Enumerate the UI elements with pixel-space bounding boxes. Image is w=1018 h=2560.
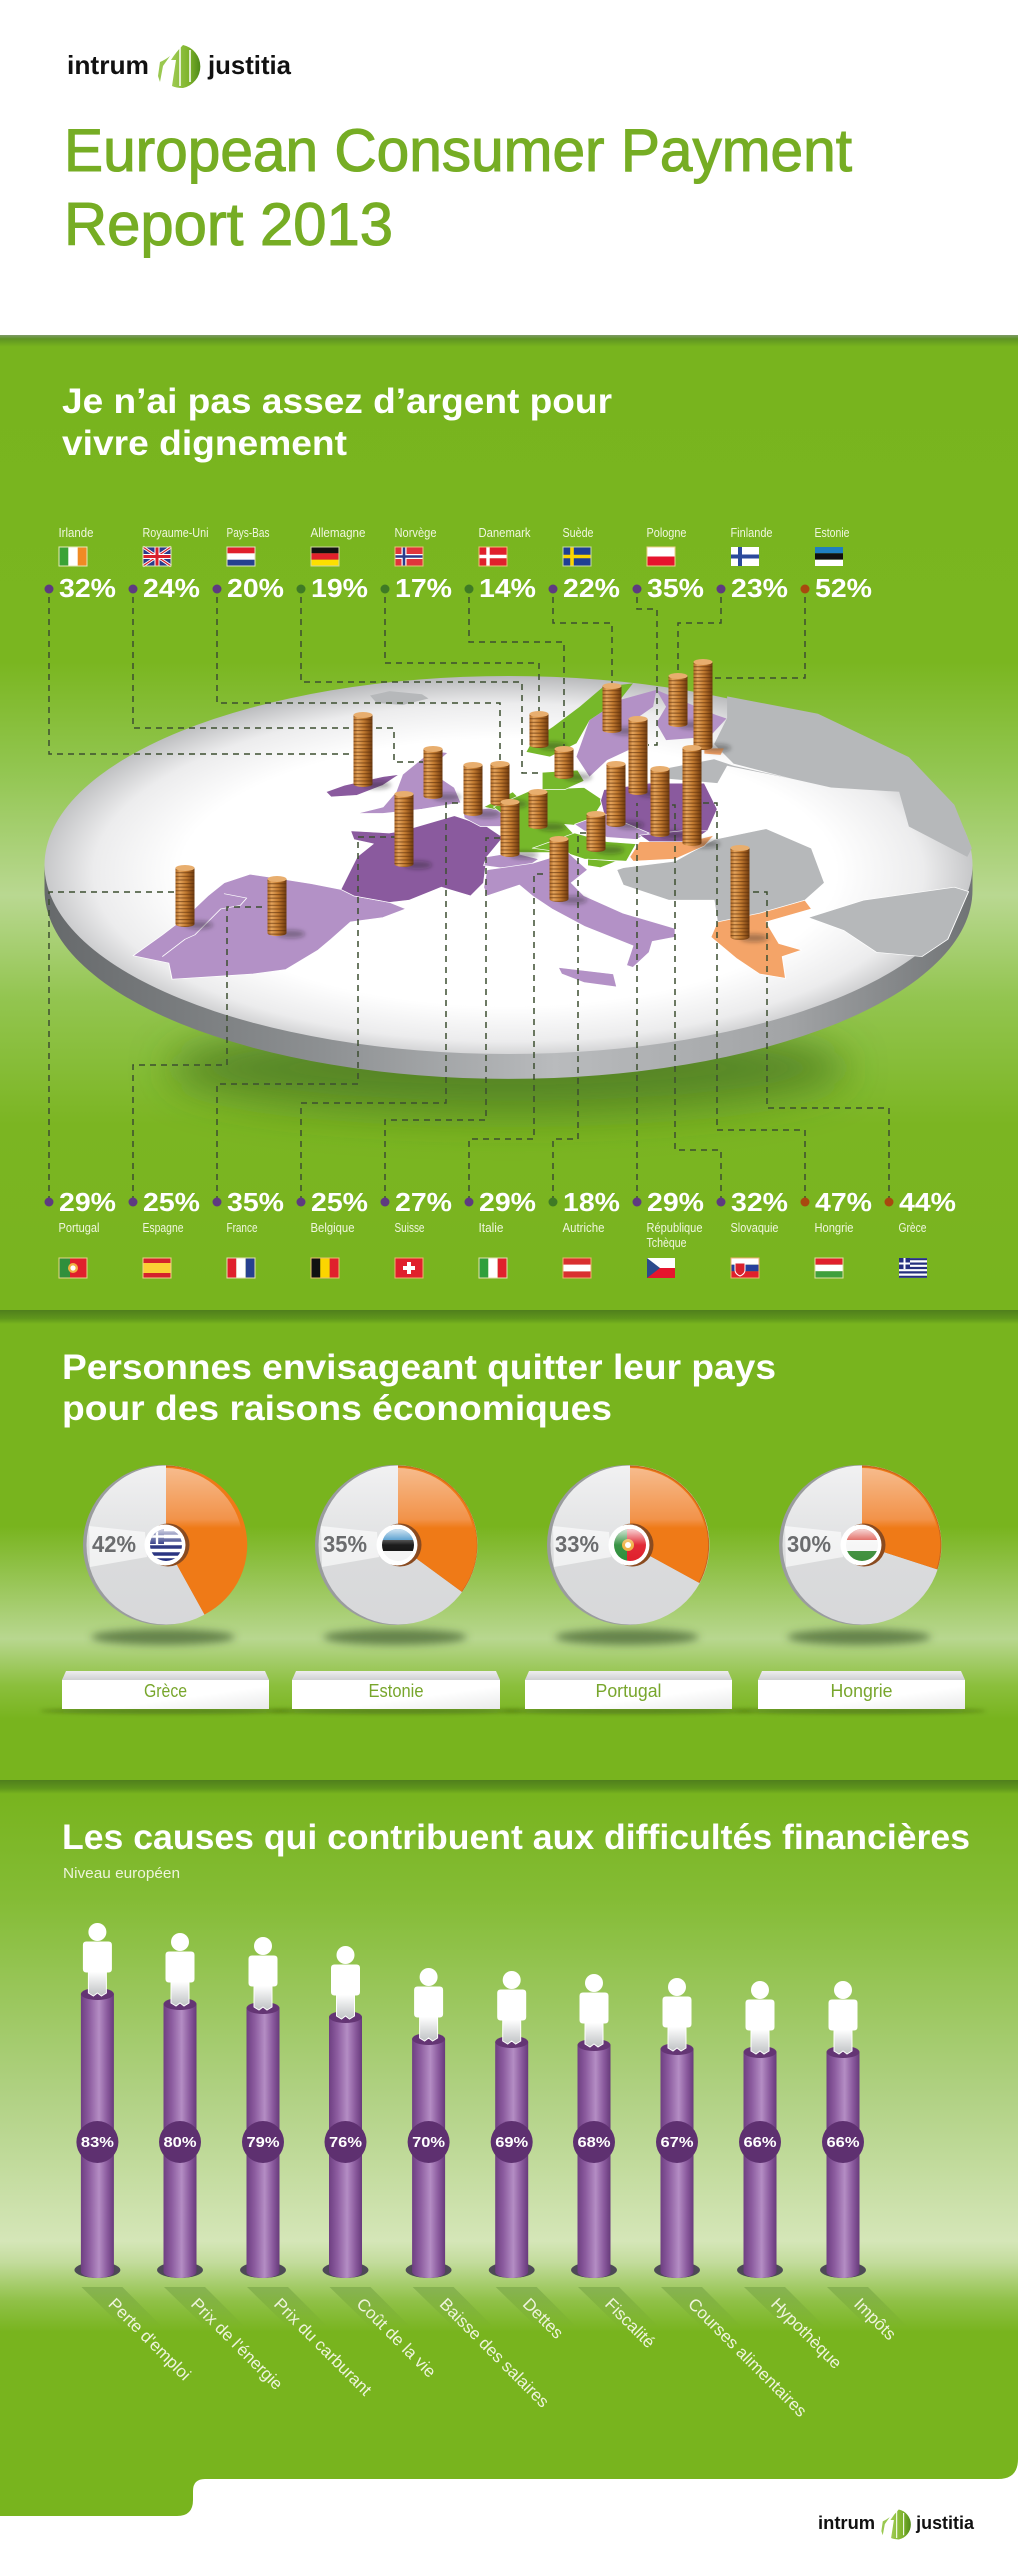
icon: Estonian flag bbox=[382, 1529, 414, 1561]
bar: Impôts 66% bbox=[820, 1981, 908, 2344]
dashed leader lines bbox=[49, 597, 889, 1202]
country: République Tchèque 29%: Tchèque bbox=[646, 1235, 686, 1250]
bar: Courses alimentaires 67%: Courses alimentaires bbox=[684, 2294, 811, 2421]
label box: Hongrie: Hongrie bbox=[830, 1681, 892, 1701]
bar: Baisse des salaires 70%: Baisse des salaires bbox=[436, 2294, 553, 2411]
panel: emigration section bbox=[0, 1310, 1018, 1780]
bar: Perte d'emploi 83%: 83% bbox=[81, 2134, 114, 2151]
country: Belgique 25%: 25% bbox=[311, 1187, 368, 1217]
country: Finlande 23%: 23% bbox=[731, 573, 788, 603]
stack: Suède bbox=[602, 683, 640, 735]
country: Portugal 29%: 29% bbox=[59, 1187, 116, 1217]
country: Norvège 17%: Norvège bbox=[394, 525, 436, 540]
country: Royaume-Uni 24%: Royaume-Uni bbox=[142, 525, 209, 540]
bar: Fiscalité 68%: 68% bbox=[578, 2134, 610, 2151]
bar: Perte d'emploi 83% bbox=[74, 1923, 194, 2384]
country: Estonie 52%: Estonie bbox=[814, 525, 850, 540]
country: Finlande 23% bbox=[716, 525, 788, 603]
stack: Estonie bbox=[694, 659, 731, 752]
country: Pays-Bas 20%: 20% bbox=[227, 573, 284, 603]
country: Italie 29% bbox=[464, 1187, 536, 1278]
label box: Hongrie bbox=[736, 1671, 986, 1714]
country: Pays-Bas 20%: Pays-Bas bbox=[226, 525, 270, 540]
stack: Hongrie bbox=[682, 745, 720, 848]
label box: Portugal bbox=[503, 1671, 753, 1714]
stack: Norvège bbox=[530, 711, 567, 750]
footer logo: justitia bbox=[915, 2513, 975, 2533]
pie chart: Portugal 33%: 33% bbox=[555, 1531, 599, 1557]
country: République Tchèque 29%: 29% bbox=[647, 1187, 704, 1217]
title: Report 2013 bbox=[64, 191, 393, 258]
country: France 35%: 35% bbox=[227, 1187, 284, 1217]
panel: causes section bbox=[0, 1780, 1018, 2516]
country: Estonie 52%: 52% bbox=[815, 573, 872, 603]
stack: Irlande bbox=[354, 712, 391, 789]
country: Irlande 32% bbox=[44, 525, 116, 603]
top country row bbox=[44, 525, 872, 603]
stack: Slovaquie bbox=[650, 766, 688, 839]
country: Allemagne 19%: Allemagne bbox=[310, 525, 366, 540]
country: Autriche 18%: Autriche bbox=[562, 1220, 604, 1235]
heading: not enough money: vivre dignement bbox=[62, 424, 347, 463]
bar: Courses alimentaires 67%: 67% bbox=[660, 2134, 694, 2151]
stack: Portugal bbox=[176, 865, 213, 929]
bar: Prix de l'énergie 80%: Prix de l'énergie bbox=[187, 2294, 286, 2394]
logo: intrum justitia: intrum bbox=[67, 50, 149, 80]
country: Slovaquie 32% bbox=[716, 1187, 788, 1278]
stack: Espagne bbox=[268, 876, 305, 938]
country: Danemark 14%: 14% bbox=[479, 573, 536, 603]
country: Suède 22%: 22% bbox=[563, 573, 620, 603]
map disc bbox=[44, 676, 972, 1079]
logo: intrum justitia: justitia bbox=[207, 50, 292, 80]
label box: Estonie bbox=[271, 1671, 521, 1714]
country: Danemark 14% bbox=[464, 525, 536, 603]
heading: not enough money: Je n’ai pas assez d’argent pour bbox=[62, 382, 612, 421]
heading: leaving the country bbox=[62, 1348, 776, 1428]
country: Pologne 35% bbox=[632, 525, 704, 603]
country: Pologne 35%: Pologne bbox=[646, 525, 686, 540]
pie chart: Hongrie 30% bbox=[779, 1465, 942, 1645]
country: Belgique 25%: Belgique bbox=[310, 1220, 354, 1235]
country: République Tchèque 29%: République bbox=[646, 1220, 702, 1235]
heading: leaving the country: pour des raisons économiques bbox=[62, 1389, 612, 1428]
country: République Tchèque 29% bbox=[632, 1187, 704, 1278]
country: Irlande 32%: 32% bbox=[59, 573, 116, 603]
pie chart: Hongrie 30%: 30% bbox=[787, 1531, 831, 1557]
bar: Coût de la vie 76% bbox=[322, 1946, 440, 2381]
pie chart: Estonie 35%: 35% bbox=[323, 1531, 367, 1557]
footer logo: intrum bbox=[818, 2513, 875, 2533]
bar: Dettes 69% bbox=[489, 1971, 577, 2343]
country: Royaume-Uni 24%: 24% bbox=[143, 573, 200, 603]
country: Belgique 25% bbox=[296, 1187, 368, 1278]
country: Pays-Bas 20% bbox=[212, 525, 284, 603]
stack: Pologne bbox=[628, 716, 666, 797]
bar: Prix du carburant 79% bbox=[240, 1937, 375, 2400]
heading: causes: Les causes qui contribuent aux difficultés financières bbox=[62, 1818, 970, 1857]
country: Suisse 27%: Suisse bbox=[394, 1220, 424, 1235]
country: Allemagne 19% bbox=[296, 525, 368, 603]
map of Europe bbox=[133, 683, 972, 987]
bar: Hypothèque 66%: Hypothèque bbox=[767, 2294, 845, 2373]
panel: map section bbox=[0, 335, 1018, 1310]
pie chart: Portugal 33% bbox=[547, 1465, 710, 1645]
bar: Prix de l'énergie 80%: 80% bbox=[164, 2134, 196, 2151]
icon: Hungarian flag bbox=[846, 1529, 878, 1561]
country: Autriche 18%: 18% bbox=[563, 1187, 620, 1217]
label box: Portugal: Portugal bbox=[596, 1681, 662, 1701]
bar: Impôts 66%: Impôts bbox=[850, 2294, 900, 2344]
icon: Greek flag bbox=[150, 1529, 182, 1561]
pie chart: Estonie 35% bbox=[315, 1465, 478, 1645]
country: Hongrie 47% bbox=[800, 1187, 872, 1278]
country: France 35%: France bbox=[226, 1220, 258, 1235]
country: Suède 22%: Suède bbox=[562, 525, 594, 540]
title: European Consumer Payment bbox=[64, 117, 852, 184]
stack: Pays-Bas bbox=[490, 761, 528, 808]
bottom country row bbox=[44, 1187, 956, 1278]
stack: République Tchèque bbox=[606, 761, 644, 829]
bar: Impôts 66%: 66% bbox=[826, 2134, 860, 2151]
country: Espagne 25%: 25% bbox=[143, 1187, 200, 1217]
bar: Dettes 69%: 69% bbox=[495, 2134, 528, 2151]
country: Grèce 44% bbox=[884, 1187, 956, 1278]
country: Grèce 44%: Grèce bbox=[898, 1220, 926, 1235]
bar: Baisse des salaires 70% bbox=[406, 1968, 553, 2411]
country: Hongrie 47%: Hongrie bbox=[814, 1220, 854, 1235]
stack: Allemagne bbox=[528, 789, 566, 831]
country: Royaume-Uni 24% bbox=[128, 525, 209, 603]
country: Pologne 35%: 35% bbox=[647, 573, 704, 603]
bar: Baisse des salaires 70%: 70% bbox=[412, 2134, 445, 2151]
country: Grèce 44%: 44% bbox=[899, 1187, 956, 1217]
country: Suisse 27%: 27% bbox=[395, 1187, 452, 1217]
shadow under disc bbox=[168, 1022, 848, 1114]
bar: Dettes 69%: Dettes bbox=[519, 2294, 567, 2343]
stack: Belgique bbox=[464, 762, 501, 818]
country: Suède 22% bbox=[548, 525, 620, 603]
icon: Portuguese flag bbox=[614, 1529, 646, 1561]
country: Estonie 52% bbox=[800, 525, 872, 603]
heading: not enough money bbox=[62, 382, 612, 463]
stack: Autriche bbox=[586, 811, 624, 854]
stack: Royaume-Uni bbox=[424, 746, 461, 801]
country: Italie 29%: Italie bbox=[478, 1220, 504, 1235]
bar: Coût de la vie 76%: Coût de la vie bbox=[353, 2294, 440, 2381]
country: Norvège 17%: 17% bbox=[395, 573, 452, 603]
bar: Coût de la vie 76%: 76% bbox=[329, 2134, 362, 2151]
logo: intrum justitia bbox=[67, 45, 292, 88]
bar: Prix du carburant 79%: Prix du carburant bbox=[270, 2294, 375, 2400]
country: Italie 29%: 29% bbox=[479, 1187, 536, 1217]
country: Allemagne 19%: 19% bbox=[311, 573, 368, 603]
stack: France bbox=[394, 791, 432, 869]
footer logo bbox=[818, 2510, 975, 2539]
country: Portugal 29%: Portugal bbox=[58, 1220, 100, 1235]
pie chart: Grèce 42%: 42% bbox=[92, 1531, 136, 1557]
bar: Perte d'emploi 83%: Perte d'emploi bbox=[105, 2294, 194, 2384]
bar: Hypothèque 66%: 66% bbox=[744, 2134, 776, 2151]
country: Irlande 32%: Irlande bbox=[58, 525, 94, 540]
country: Autriche 18% bbox=[548, 1187, 620, 1278]
subheading: Niveau européen bbox=[63, 1865, 180, 1882]
bar: Prix du carburant 79%: 79% bbox=[246, 2134, 280, 2151]
label box: Estonie: Estonie bbox=[368, 1681, 424, 1701]
stack: Finlande bbox=[668, 673, 706, 729]
bar: Prix de l'énergie 80% bbox=[157, 1933, 286, 2394]
country: Espagne 25%: Espagne bbox=[142, 1220, 184, 1235]
stack: Suisse bbox=[500, 799, 538, 859]
country: Slovaquie 32%: Slovaquie bbox=[730, 1220, 778, 1235]
header: white band bbox=[0, 0, 1018, 335]
heading: leaving the country: Personnes envisageant quitter leur pays bbox=[62, 1348, 776, 1387]
country: Portugal 29% bbox=[44, 1187, 116, 1278]
country: France 35% bbox=[212, 1187, 284, 1278]
country: Slovaquie 32%: 32% bbox=[731, 1187, 788, 1217]
bar: Fiscalité 68%: Fiscalité bbox=[601, 2294, 659, 2352]
pie chart: Grèce 42% bbox=[83, 1465, 247, 1645]
country: Finlande 23%: Finlande bbox=[730, 525, 772, 540]
country: Suisse 27% bbox=[380, 1187, 452, 1278]
coin stacks bbox=[176, 659, 768, 942]
stack: Danemark bbox=[554, 746, 592, 781]
label box: Grèce: Grèce bbox=[144, 1681, 187, 1701]
country: Danemark 14%: Danemark bbox=[478, 525, 531, 540]
label box: Grèce bbox=[40, 1671, 290, 1714]
bar: Fiscalité 68% bbox=[571, 1974, 659, 2352]
title bbox=[64, 117, 852, 258]
stack: Grèce bbox=[730, 845, 768, 942]
country: Norvège 17% bbox=[380, 525, 452, 603]
country: Espagne 25% bbox=[128, 1187, 200, 1278]
stack: Italie bbox=[550, 836, 587, 904]
bar: Courses alimentaires 67% bbox=[654, 1978, 811, 2421]
country: Hongrie 47%: 47% bbox=[815, 1187, 872, 1217]
bar: Hypothèque 66% bbox=[737, 1981, 845, 2373]
